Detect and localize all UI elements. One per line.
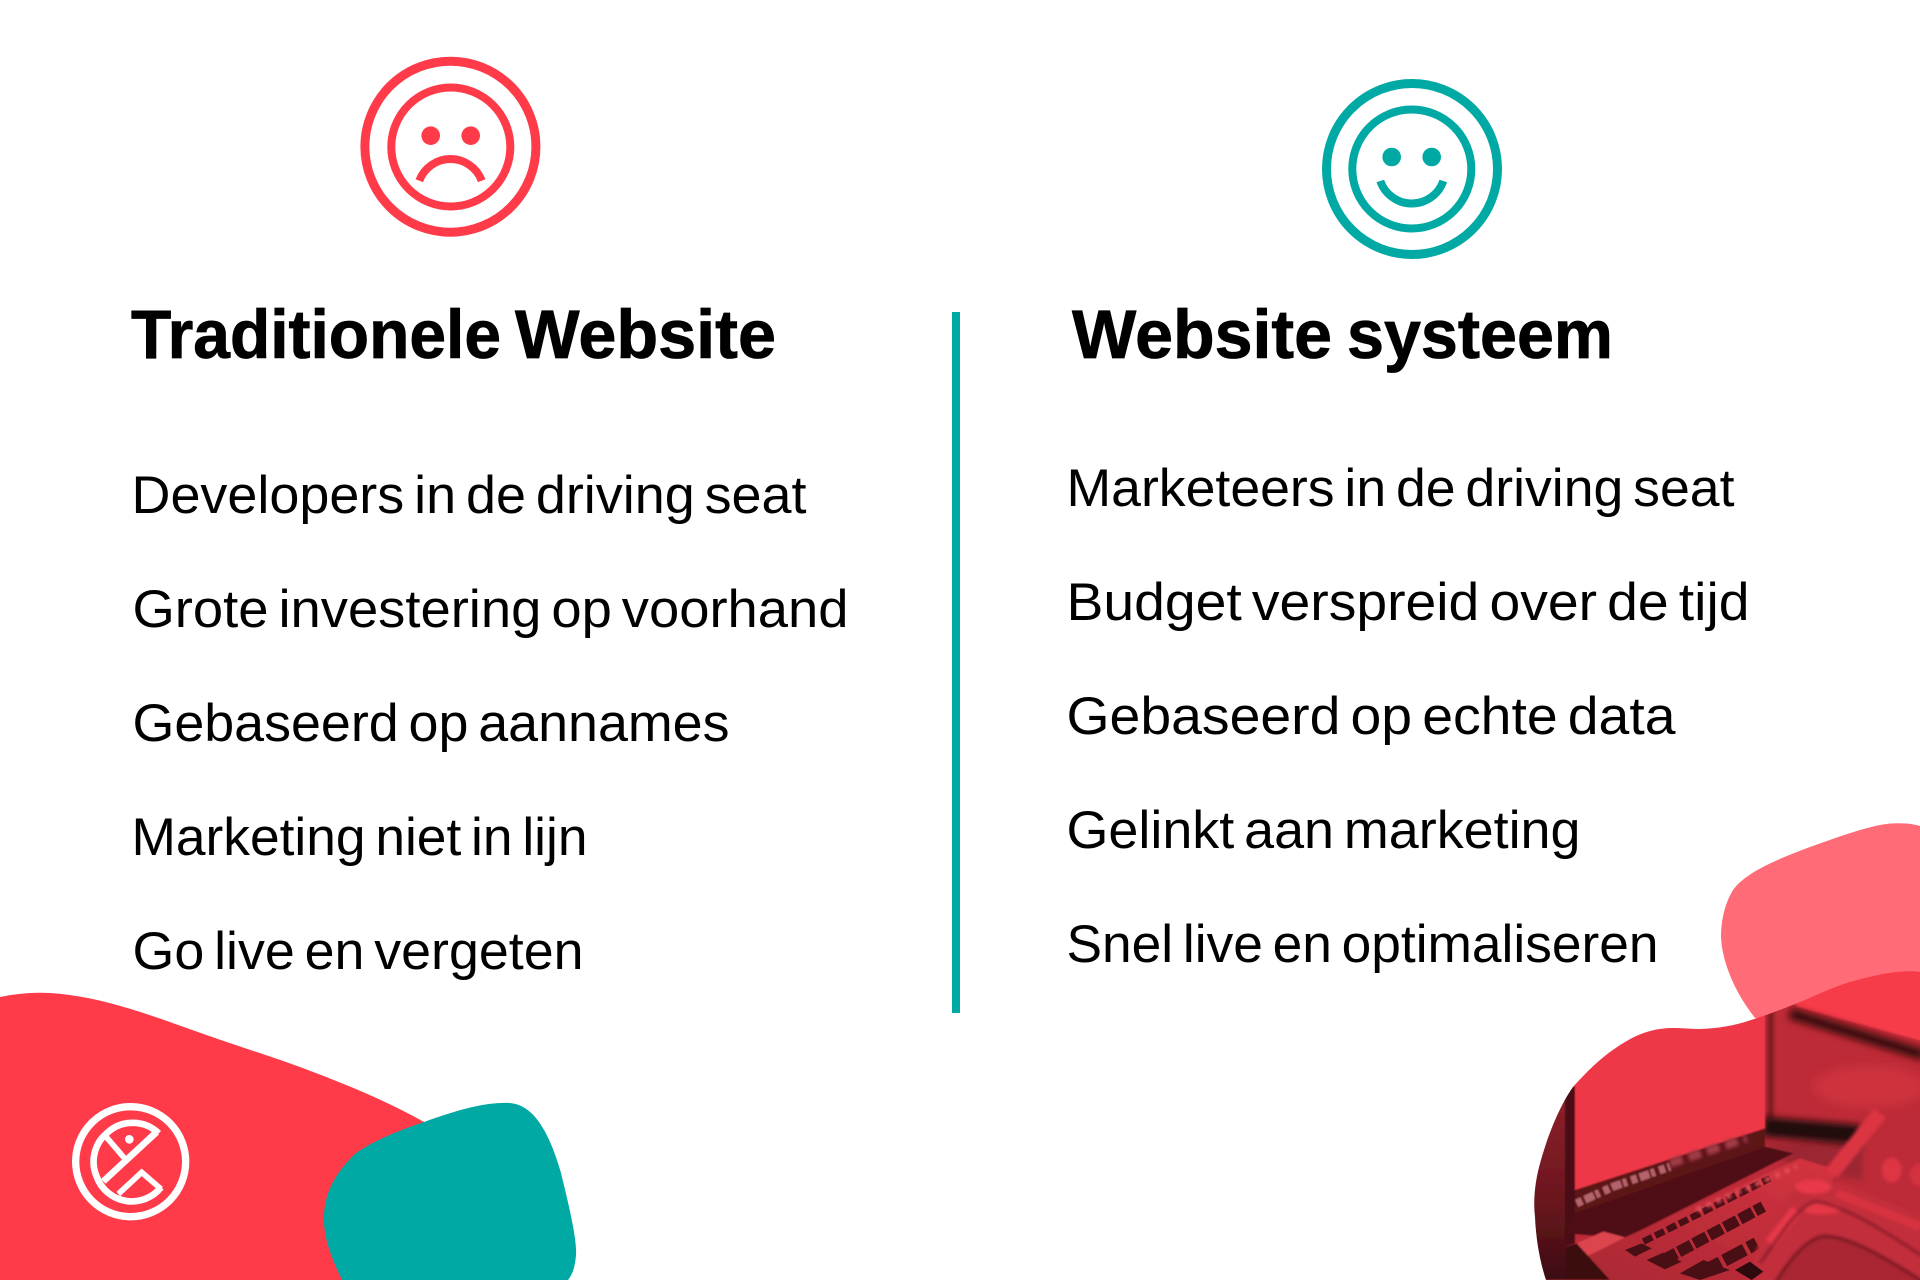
heading: Website systeem: Website [1072, 296, 1332, 373]
heading: Traditionele Website: Website [515, 296, 776, 373]
list: website system: Budget verspreid over de tijd [1066, 573, 1750, 632]
list: website system: Snel live en optimaliseren [1066, 915, 1658, 974]
photo: laptop and typing hands in red duotone [1534, 971, 1920, 1280]
list: traditional website: Go live en vergeten [132, 922, 584, 981]
heading: Website systeem: systeem [1347, 296, 1613, 373]
list: website system [1066, 459, 1750, 974]
background blob: teal bottom-left [324, 1103, 576, 1280]
heading: Website systeem [1072, 296, 1613, 373]
logo: white circular emblem [76, 1107, 186, 1217]
list: traditional website: Marketing niet in lijn [132, 808, 588, 867]
list: website system: Marketeers in de driving seat [1066, 459, 1735, 518]
vertical divider [952, 312, 960, 1013]
list: website system: Gebaseerd op echte data [1066, 687, 1676, 746]
list: traditional website [132, 466, 848, 981]
icon: happy face [1326, 84, 1498, 254]
list: traditional website: Developers in de driving seat [132, 466, 807, 525]
icon: sad face [365, 61, 536, 232]
list: website system: Gelinkt aan marketing [1066, 801, 1580, 860]
background blob: red bottom-left [0, 993, 450, 1280]
list: traditional website: Gebaseerd op aannames [132, 694, 730, 753]
list: traditional website: Grote investering op voorhand [132, 580, 848, 639]
background blob: light red bottom-right [1721, 823, 1920, 1018]
heading: Traditionele Website [131, 296, 776, 373]
heading: Traditionele Website: Traditionele [131, 296, 501, 373]
